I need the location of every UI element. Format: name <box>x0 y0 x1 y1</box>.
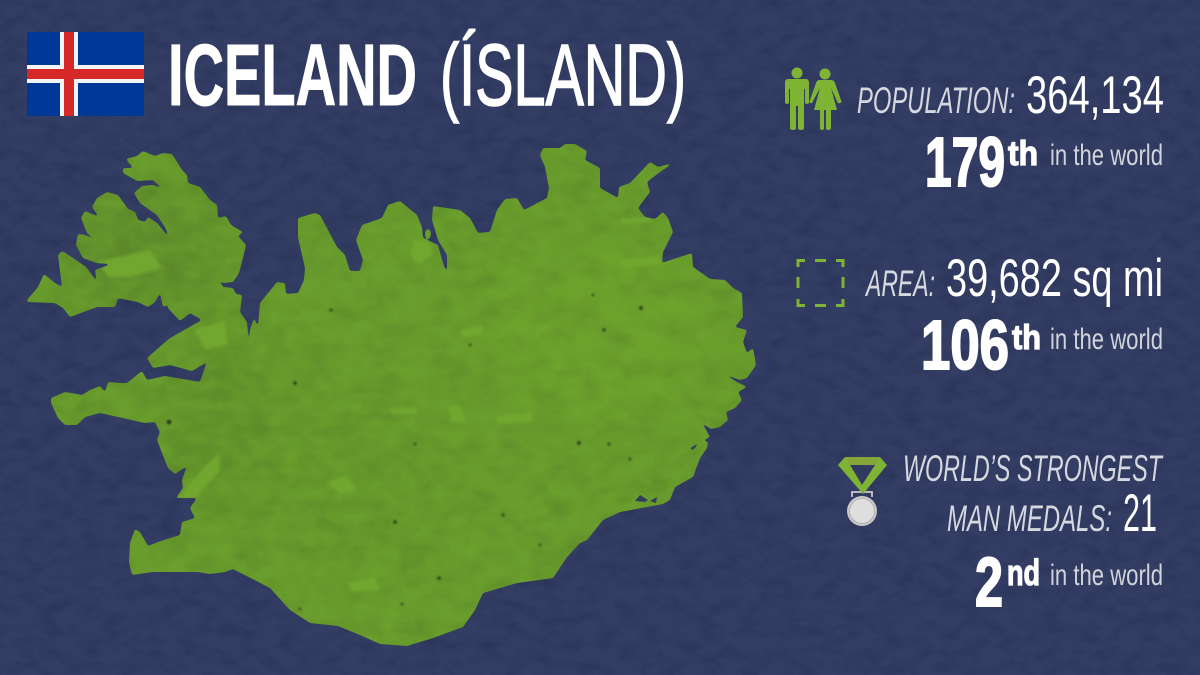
inland water details <box>635 495 657 503</box>
population label and value: POPULATION: <box>857 80 1015 121</box>
title: ICELAND <box>168 27 417 124</box>
icon: Icelandic flag <box>27 32 144 116</box>
area rank: 106 <box>921 306 1009 384</box>
area rank: in the world <box>1050 323 1163 356</box>
lighter patches <box>97 217 660 592</box>
icon: dashed square <box>798 260 843 306</box>
medals rank: nd <box>1007 552 1040 593</box>
panel: area <box>798 249 1163 384</box>
title: (ÍSLAND) <box>440 27 686 124</box>
icon: man and woman <box>785 68 841 130</box>
medals rank: in the world <box>1050 559 1163 592</box>
medals label and value: MAN MEDALS: <box>947 498 1112 539</box>
medals rank: 2 <box>975 543 1003 621</box>
panel: strongest man medals <box>838 448 1164 621</box>
area label and value <box>865 249 1163 308</box>
area rank <box>921 306 1163 384</box>
panel: population <box>785 66 1164 201</box>
medals rank <box>975 543 1163 621</box>
medals label and value: 21 <box>1123 484 1157 543</box>
area rank: th <box>1012 319 1041 357</box>
darker Westfjords and interior shading <box>62 206 708 469</box>
population rank: in the world <box>1050 139 1163 172</box>
population rank: 179 <box>925 123 1005 201</box>
area label and value: AREA: <box>865 263 935 304</box>
dark specks <box>167 294 643 610</box>
icon: silver medal <box>838 457 887 526</box>
map: Iceland silhouette <box>27 144 756 646</box>
population label and value <box>857 66 1164 125</box>
population rank: th <box>1008 135 1038 173</box>
population rank <box>925 123 1163 201</box>
medals label and value <box>903 448 1164 543</box>
